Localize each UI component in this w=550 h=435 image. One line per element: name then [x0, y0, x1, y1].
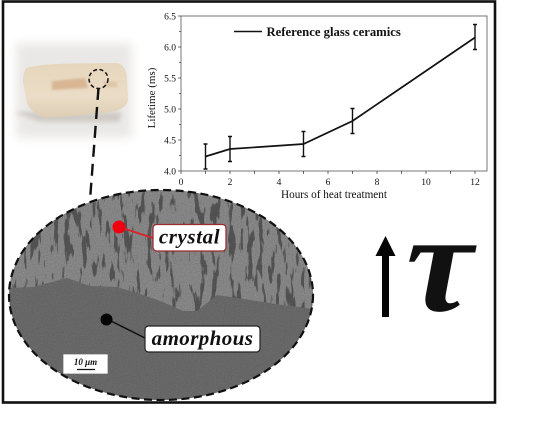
- crystal region: [10, 190, 313, 311]
- photo: glass ceramic sample: [14, 43, 132, 138]
- amorphous label: amorphous: [152, 326, 253, 350]
- chart ticks: [178, 16, 475, 174]
- tau symbol: τ: [406, 184, 477, 342]
- crystal marker and leader: [112, 220, 153, 238]
- y axis tick labels: 4.0: [164, 168, 176, 178]
- x axis title: Hours of heat treatment: [281, 189, 388, 201]
- y axis tick labels: 6.0: [164, 44, 176, 54]
- error bars: [204, 24, 477, 169]
- dashed ellipse outline: [9, 190, 313, 400]
- grain texture: [9, 190, 313, 400]
- micrograph ellipse: [5, 185, 320, 400]
- x axis tick labels: 10: [421, 178, 431, 188]
- line chart: lifetime vs hours of heat treatment: [146, 12, 487, 201]
- y axis tick labels: [164, 12, 176, 178]
- icon: dashed sample circle: [89, 70, 108, 88]
- arrow: lifetime increases: [376, 236, 396, 317]
- x axis tick labels: 4: [277, 178, 282, 188]
- x axis tick labels: 2: [228, 178, 233, 188]
- x axis tick labels: 12: [470, 178, 480, 188]
- x axis tick labels: 8: [375, 178, 380, 188]
- amorphous marker and leader: [100, 314, 145, 338]
- x axis tick labels: [179, 178, 480, 188]
- scale bar: [64, 354, 108, 374]
- data line: [206, 38, 475, 156]
- scale bar: 10 μm: [74, 357, 97, 367]
- legend: Reference glass ceramics: [266, 25, 401, 39]
- y axis title: Lifetime (ms): [146, 67, 158, 128]
- y axis tick labels: 6.5: [164, 12, 176, 22]
- x axis tick labels: 6: [326, 178, 331, 188]
- x axis tick labels: 0: [179, 178, 184, 188]
- dashed zoom connector: [90, 88, 98, 200]
- crystal label: crystal: [159, 224, 220, 248]
- y axis tick labels: 4.5: [164, 136, 176, 146]
- y axis tick labels: 5.0: [164, 106, 176, 116]
- chart plot frame: [181, 16, 487, 171]
- y axis tick labels: 5.5: [164, 74, 176, 84]
